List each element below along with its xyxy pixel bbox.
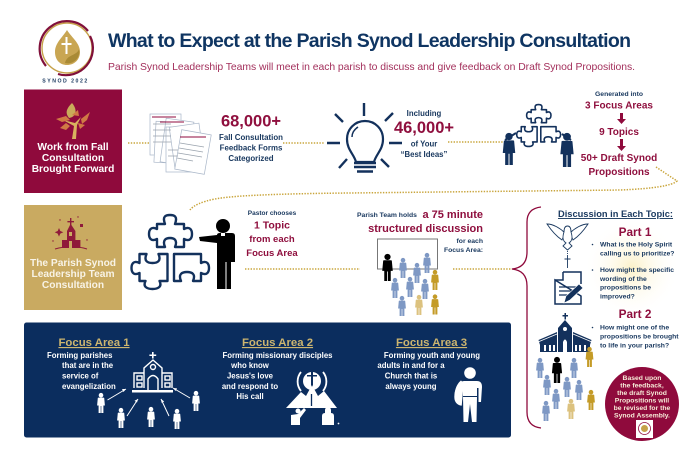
focus area 3: Forming youth and young [384,351,480,360]
text: pastor chooses: Pastor chooses [248,210,297,217]
people group [536,347,595,421]
part 1: What is the Holy Spirit [600,242,673,248]
icon: feedback forms [150,114,211,174]
box text: Consultation [42,153,104,164]
generated outputs: Propositions [588,167,650,178]
part 1: wording of the [599,276,647,283]
part 1 [592,225,674,300]
box text: The Parish Synod [30,258,116,269]
panel: discussion in each topic [536,209,680,441]
panel: focus areas [24,322,511,438]
text: structured discussion: Focus Area: [444,247,483,254]
box text: Brought Forward [32,164,114,175]
part 2: Part 2 [619,307,652,321]
focus area 2 [222,337,339,425]
box text [30,258,116,291]
focus area 3: Focus Area 3 [396,337,467,349]
part 2: How might one of the [600,324,669,332]
focus area 2: Focus Area 2 [242,337,313,349]
icon: tree [56,103,90,139]
stat: 46,000+: Including [407,109,442,118]
part 2: to life in your parish? [600,342,669,350]
part 1: Part 1 [619,225,652,239]
generated outputs: 3 Focus Areas [585,100,653,112]
icon: large puzzle pieces [132,215,209,289]
generated outputs: 9 Topics [599,127,639,138]
icon: classroom group [378,239,439,316]
heading: Discussion in Each Topic: [558,209,673,219]
callout: revised for the synod assembly [605,367,679,441]
callout: revised for the synod assembly: be revised for the [614,405,671,412]
callout: revised for the synod assembly: Propositions will [615,398,669,404]
text: pastor chooses [246,210,298,259]
stat: 46,000+: 46,000+ [394,119,454,137]
callout: revised for the synod assembly: Based upon [623,375,661,382]
icon: young person with backpack [454,367,482,422]
stat: 68,000+: Fall Consultation [219,133,283,142]
text: structured discussion: Parish Team holds [357,212,417,219]
focus area 3: adults in and for a [377,361,445,370]
box text [32,142,114,175]
connector: long curved dotted line [190,167,677,210]
text: pastor chooses: Focus Area [246,248,298,259]
focus area 1: service of [62,372,99,380]
part 1: propositions be [600,284,651,292]
stat: 68,000+: Feedback Forms [220,144,283,152]
focus area 1 [47,337,200,429]
focus area 2: Forming missionary disciples [222,351,333,360]
generated outputs [581,91,657,178]
icon: puzzle team [503,105,574,167]
generated outputs: Generated into [595,91,643,98]
panel: work from fall consultation [24,90,122,193]
focus area 3 [377,337,482,422]
stat: 68,000+: 68,000+ [221,112,281,130]
stat: 46,000+: of Your [411,140,437,148]
bracket [512,207,541,428]
focus area 1: evangelization [62,382,116,391]
title: What to Expect at the Parish Synod Leadership Consultation [108,30,631,52]
part 2 [592,307,679,350]
focus area 2: who know [230,361,270,370]
focus area 3: Church that is [385,372,438,380]
logo: Synod 2022: SYNOD 2022 [42,78,89,84]
text: structured discussion: structured discussion [368,223,483,235]
connector: dotted line one [128,142,150,144]
logo: Synod 2022 [40,21,93,84]
icon: lightbulb [327,103,402,172]
connector: dotted line two [283,142,325,144]
icon: document and pencil [555,272,583,304]
icon: cathedral [538,313,592,352]
text: pastor chooses: 1 Topic [254,220,290,232]
stat: 68,000+ [219,112,283,163]
stat: 46,000+ [394,109,454,159]
connector: dotted line three [448,141,503,143]
part 1: improved? [600,294,635,300]
part 2: propositions be brought [600,334,679,340]
box text: Leadership Team [31,269,115,280]
text: structured discussion [357,209,483,254]
callout: revised for the synod assembly: the feedback, [620,382,664,390]
focus area 3: always young [385,382,437,391]
box text: Work from Fall [37,142,109,153]
part 1: How might the specific [600,267,674,274]
stat: 68,000+: Categorized [228,154,274,163]
text: structured discussion: a 75 minute [422,209,483,221]
focus area 1: Forming parishes [47,351,113,360]
focus area 2: Jesus's love [227,372,274,380]
text: pastor chooses: from each [249,234,295,245]
focus area 2: His call [236,392,264,401]
text: structured discussion: for each [457,238,483,245]
box text: Consultation [42,280,104,291]
stat: 46,000+: “Best Ideas” [401,150,447,159]
focus area 1: Focus Area 1 [58,337,130,349]
focus area 2: and respond to [222,382,278,391]
generated outputs: 50+ Draft Synod [581,153,657,164]
icon: church with people [97,352,200,429]
icon: mountain and cross [286,371,339,425]
callout: revised for the synod assembly: the draft Synod [617,390,667,397]
panel: parish synod leadership team consultation [24,205,122,310]
focus area 1: that are in the [62,361,114,370]
callout: revised for the synod assembly: Synod Assembly. [614,412,670,420]
subtitle: Parish Synod Leadership Teams will meet in each parish to discuss and give feedback on Draft Synod Propositions. [108,62,635,73]
icon: parish church [52,216,88,249]
part 1: calling us to prioritize? [600,250,674,258]
icon: pastor pointing [199,219,235,289]
connector: dotted line four [245,268,512,270]
icon: dove and cross [547,224,588,268]
